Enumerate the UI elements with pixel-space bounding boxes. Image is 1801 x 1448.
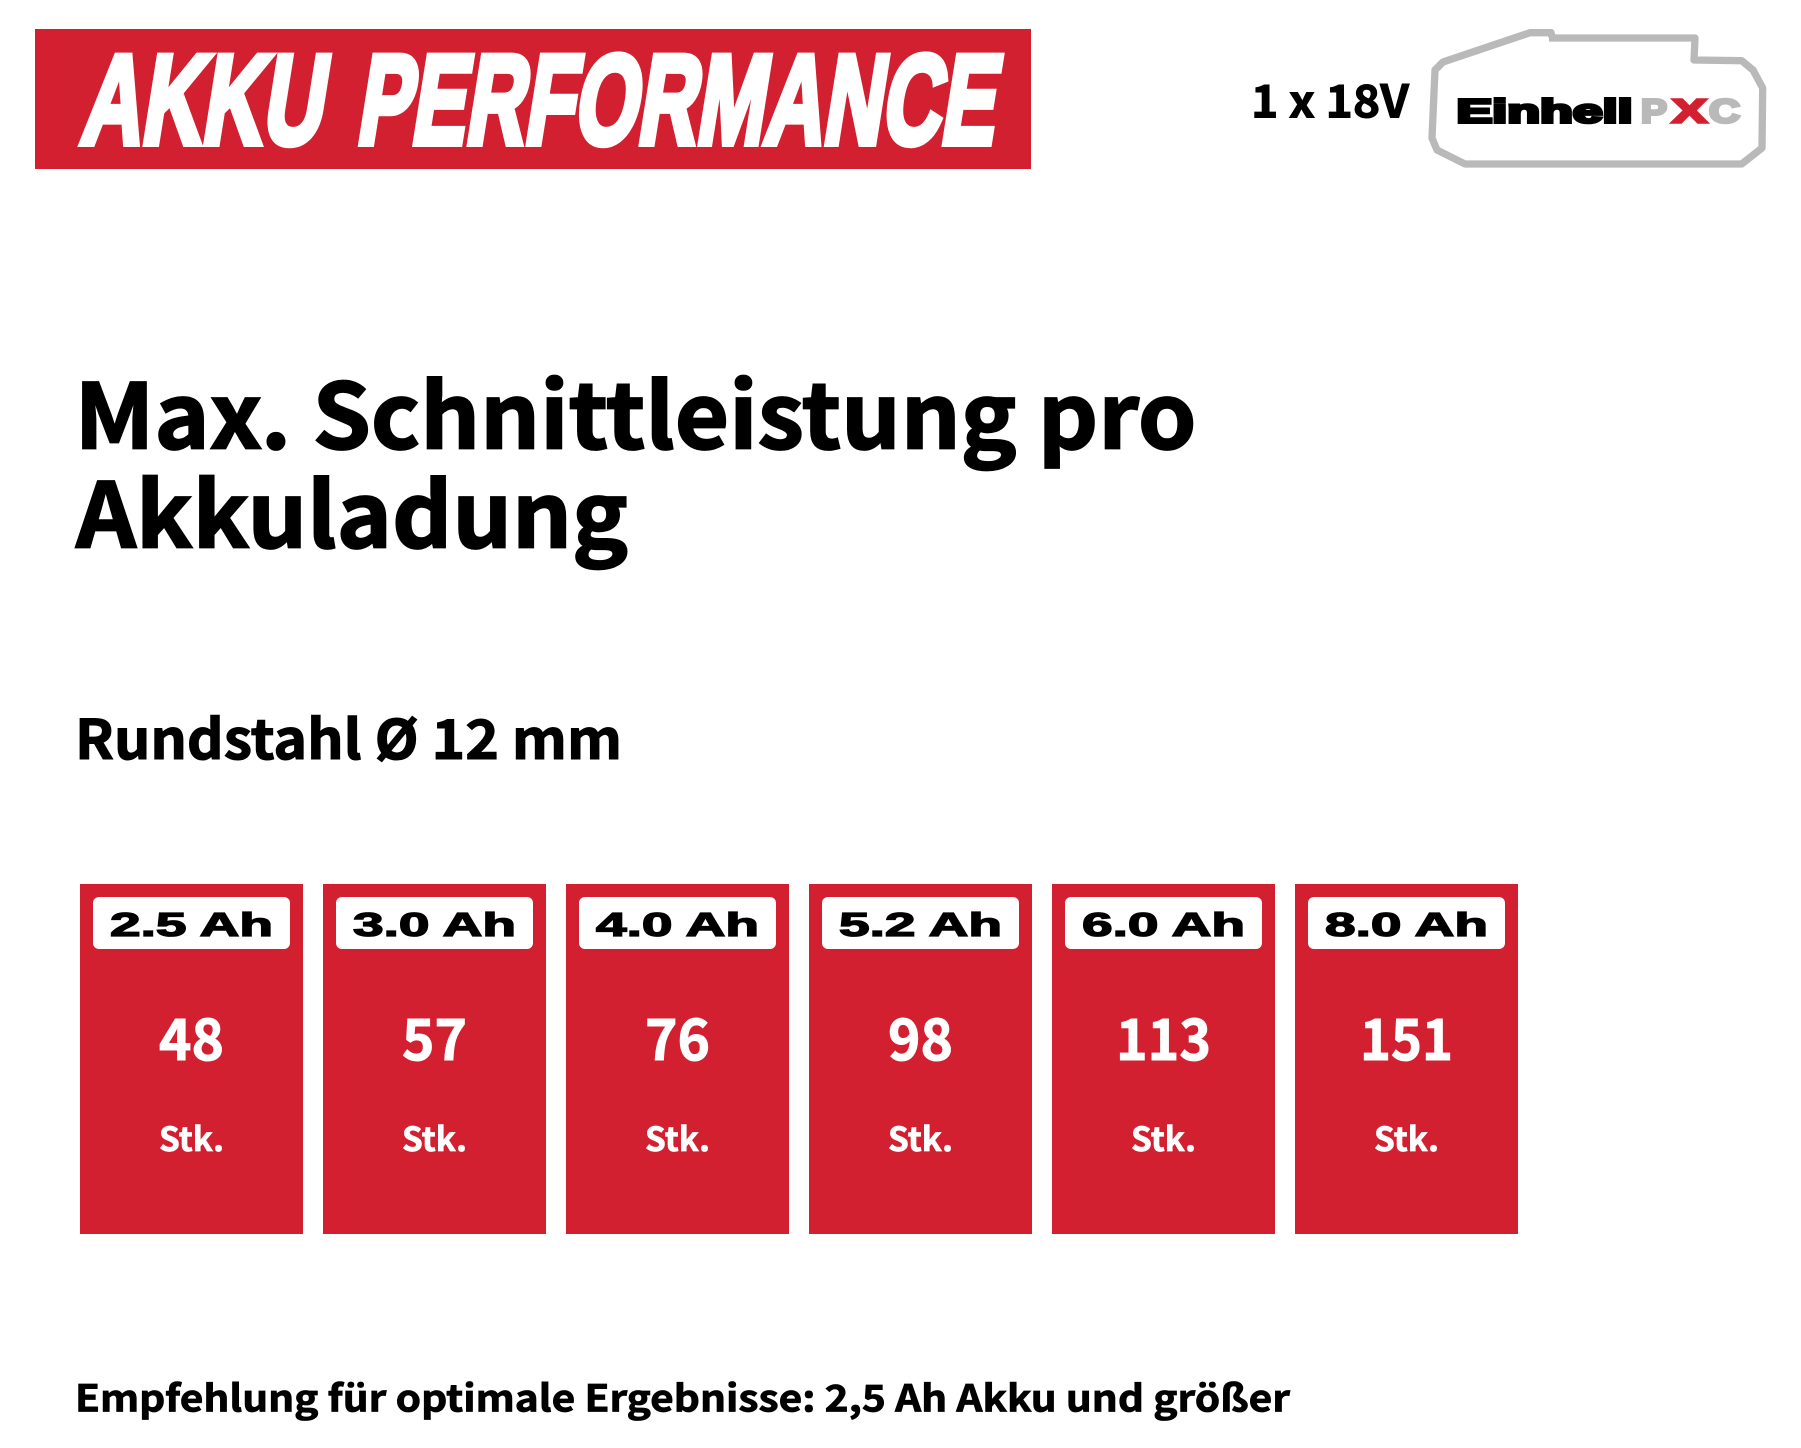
card: 4.0 Ah: 76 [645,995,710,1077]
footer recommendation: Empfehlung für optimale Ergebnisse: 2,5 Ah Akku und größer [75,1369,1291,1423]
card: 6.0 Ah: 6.0 Ah [1082,906,1245,943]
heading: Akkuladung [75,444,628,574]
card: 8.0 Ah: Stk. [1374,1113,1439,1161]
icon: Einhell PXC battery [1432,33,1763,164]
card: 5.2 Ah: 5.2 Ah [839,906,1002,943]
card: 6.0 Ah: 113 [1116,995,1211,1077]
card: 6.0 Ah [1052,884,1275,1234]
icon: Einhell PXC battery: X [1672,92,1707,130]
card: 2.5 Ah: 2.5 Ah [110,906,273,943]
icon: Einhell PXC battery: P [1641,92,1667,130]
card: 4.0 Ah: Stk. [645,1113,710,1161]
card: 3.0 Ah: 3.0 Ah [353,906,516,943]
card: 8.0 Ah: 151 [1360,995,1453,1077]
heading [74,344,1196,574]
voltage label: 1 x 18V [1251,65,1410,130]
subheading: Rundstahl Ø 12 mm [75,696,622,775]
title banner: PERFORMANCE [351,29,1011,171]
icon: Einhell PXC battery: C [1709,92,1740,130]
card: 8.0 Ah [1295,884,1518,1234]
card: 5.2 Ah: Stk. [888,1113,953,1161]
card: 2.5 Ah [80,884,303,1234]
title banner: AKKU [75,29,339,171]
card: 2.5 Ah: Stk. [159,1113,224,1161]
card: 8.0 Ah: 8.0 Ah [1325,906,1488,943]
card: 3.0 Ah [323,884,546,1234]
card: 3.0 Ah: 57 [402,995,467,1077]
heading: Max. Schnittleistung pro [74,344,1196,474]
icon: Einhell PXC battery: Einhell [1456,92,1632,130]
card: 3.0 Ah: Stk. [402,1113,467,1161]
card: 5.2 Ah [809,884,1032,1234]
card: 2.5 Ah: 48 [159,995,224,1077]
card: 4.0 Ah: 4.0 Ah [596,906,759,943]
title banner [35,29,1031,171]
card: 5.2 Ah: 98 [888,995,953,1077]
card: 4.0 Ah [566,884,789,1234]
card: 6.0 Ah: Stk. [1131,1113,1196,1161]
